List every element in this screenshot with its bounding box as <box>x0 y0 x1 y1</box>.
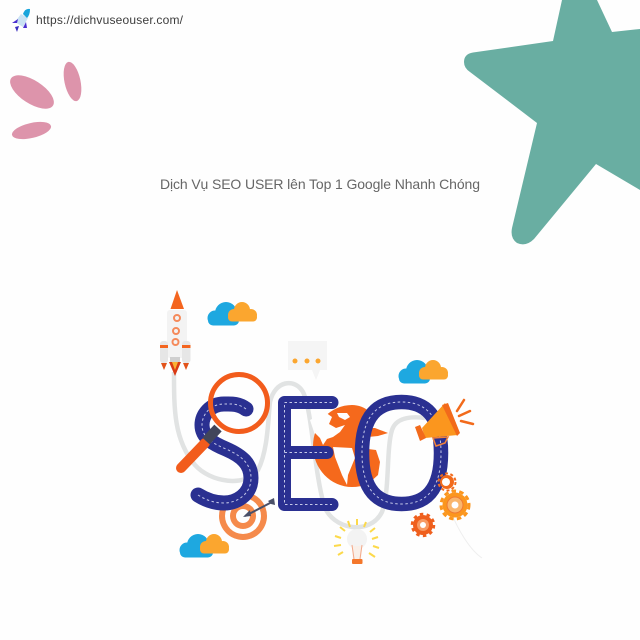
icon: magnifying glass <box>181 374 268 468</box>
connecting grey track <box>174 372 482 558</box>
icon: small rocket logo <box>12 9 30 32</box>
icon: cloud top left <box>208 302 257 326</box>
letter O <box>362 402 441 504</box>
decoration: teal star <box>464 0 640 244</box>
icon: light bulb <box>334 519 379 564</box>
icon: speech bubble <box>288 341 327 380</box>
letter S <box>198 404 251 503</box>
icon: rocket <box>160 290 190 376</box>
icon: small gear top <box>438 474 456 490</box>
decoration: pink petals <box>5 60 84 142</box>
icon: globe <box>310 405 388 487</box>
website url: https://dichvuseouser.com/ <box>36 13 184 27</box>
letter E <box>284 402 332 504</box>
icon: cloud right <box>398 360 448 384</box>
icon: large gear <box>441 491 469 519</box>
icon: cloud bottom left <box>180 534 229 558</box>
icon: megaphone <box>415 400 473 446</box>
icon: small orange gear <box>412 514 434 536</box>
illustration: SEO <box>160 290 482 564</box>
icon: target with arrow <box>219 492 275 540</box>
heading: Dịch Vụ SEO USER lên Top 1 Google Nhanh Chóng <box>160 176 480 192</box>
